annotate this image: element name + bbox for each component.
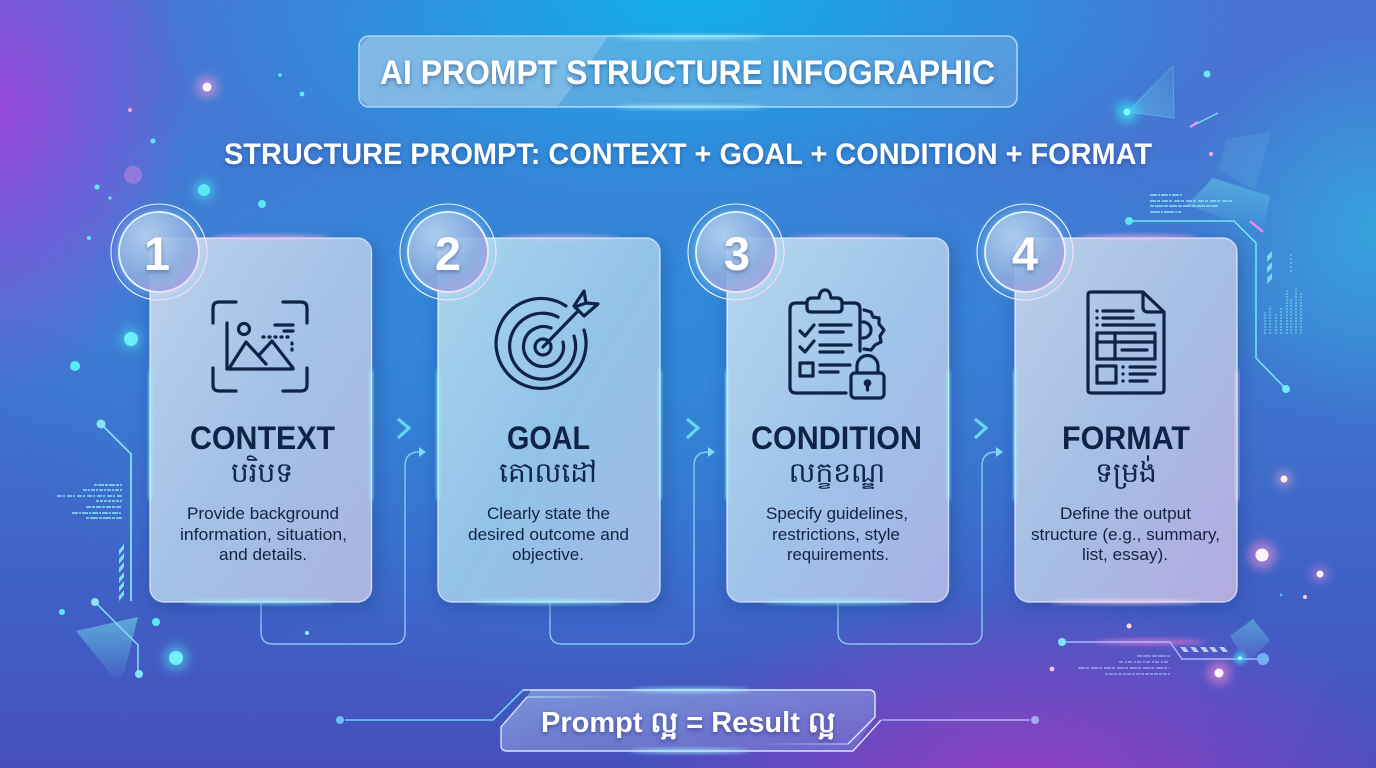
circuit decoration: right bbox=[1125, 195, 1301, 393]
Khmer label: goal: គោលដៅ bbox=[499, 457, 597, 488]
connector: step 3 to step 4 bbox=[838, 419, 1003, 644]
title panel bbox=[359, 36, 1017, 108]
description: goal bbox=[468, 505, 629, 564]
description: format bbox=[1031, 505, 1220, 564]
number badge 4: 4 bbox=[1012, 227, 1038, 280]
subtitle: prompt formula: STRUCTURE PROMPT: CONTEXT + GOAL + CONDITION + FORMAT bbox=[224, 138, 1152, 171]
result banner bbox=[336, 688, 1039, 753]
connector: step 1 to step 2 bbox=[261, 419, 426, 644]
number badge 2: 2 bbox=[435, 227, 461, 280]
icon: document with table bbox=[1088, 292, 1164, 393]
description: format: list, essay). bbox=[1082, 546, 1168, 564]
decorative particles: left bbox=[59, 73, 309, 671]
heading: context: CONTEXT bbox=[190, 420, 335, 456]
panel: condition bbox=[688, 204, 953, 609]
number badge 4 bbox=[977, 204, 1073, 300]
Khmer label: context: បរិបទ bbox=[231, 455, 293, 488]
Khmer label: format: ទម្រង់ bbox=[1095, 455, 1157, 489]
description: context bbox=[180, 505, 347, 564]
description: condition: restrictions, style bbox=[772, 526, 900, 544]
heading: format: FORMAT bbox=[1062, 420, 1190, 456]
description: goal: objective. bbox=[512, 546, 584, 564]
heading: goal: GOAL bbox=[507, 420, 590, 456]
number badge 2 bbox=[400, 204, 496, 300]
description: format: structure (e.g., summary, bbox=[1031, 526, 1220, 544]
title text: AI PROMPT STRUCTURE INFOGRAPHIC bbox=[380, 54, 995, 92]
description: condition: Specify guidelines, bbox=[766, 505, 908, 523]
description: condition: requirements. bbox=[787, 546, 889, 564]
decorative shapes: top right bbox=[1117, 66, 1271, 232]
number badge 1: 1 bbox=[144, 227, 170, 280]
icon: clipboard checklist, gear and lock bbox=[790, 290, 884, 398]
banner side line: left bbox=[336, 690, 523, 724]
description: goal: desired outcome and bbox=[468, 526, 629, 544]
number badge 1 bbox=[111, 204, 207, 300]
banner side line: right bbox=[882, 716, 1039, 724]
decorative particles: right bbox=[1050, 471, 1328, 684]
number badge 3 bbox=[688, 204, 784, 300]
banner text: Prompt ល្អ = Result ល្អ bbox=[541, 707, 836, 740]
panel: format bbox=[977, 204, 1241, 609]
description: condition bbox=[766, 505, 908, 564]
description: context: and details. bbox=[219, 546, 307, 564]
panel: context bbox=[111, 204, 376, 609]
circuit decoration: bottom right bbox=[1058, 619, 1270, 674]
heading: condition: CONDITION bbox=[751, 420, 922, 456]
description: context: Provide background bbox=[187, 505, 339, 523]
description: goal: Clearly state the bbox=[487, 505, 610, 523]
description: format: Define the output bbox=[1060, 505, 1191, 523]
circuit decoration: left bbox=[57, 420, 143, 682]
connector: step 2 to step 3 bbox=[550, 419, 715, 644]
icon: image frame bbox=[213, 302, 307, 391]
description: context: information, situation, bbox=[180, 526, 347, 544]
panel: goal bbox=[400, 204, 664, 609]
icon: target with arrow bbox=[496, 291, 598, 388]
number badge 3: 3 bbox=[724, 227, 750, 280]
Khmer label: condition: លក្ខខណ្ឌ bbox=[789, 457, 885, 489]
